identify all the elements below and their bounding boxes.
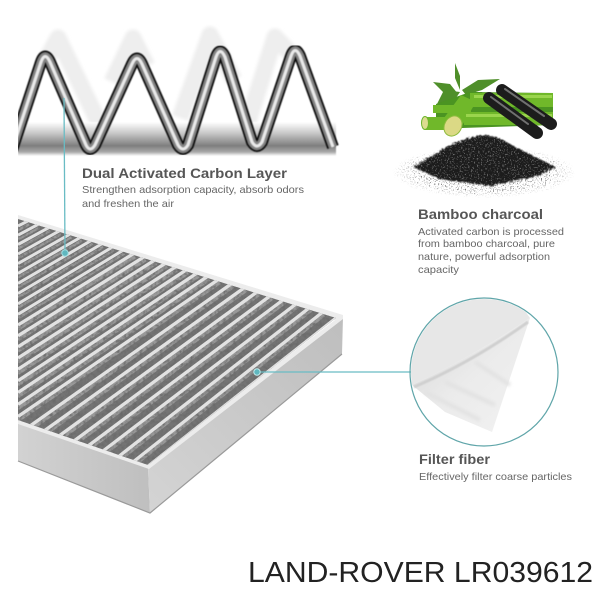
icon: bamboo and charcoal sticks [422,63,553,139]
charcoal mound [413,135,556,186]
title: part number: LAND-ROVER LR039612 [248,557,593,589]
floor shadow band [18,122,336,156]
text: bamboo charcoal description [418,226,564,276]
text: bamboo charcoal description: nature, powerful adsorption [418,251,550,263]
bamboo leaves [433,63,500,110]
callout line: filter fiber [254,369,411,375]
heading: Filter fiber: Filter fiber [419,451,491,467]
filter bottom shadow edge [18,354,342,513]
text: bamboo charcoal description: Activated carbon is processed [418,226,564,238]
text: carbon layer description: and freshen the air [82,198,175,210]
icon: filter fiber magnified circle [405,290,558,446]
pleated ribbon [12,50,333,150]
bamboo cut end [440,113,466,139]
scattered powder [392,146,576,198]
magnifier outline [410,298,558,446]
text: bamboo charcoal description: from bamboo charcoal, pure [418,238,555,250]
mound grain [416,135,554,186]
text: carbon layer description [82,184,304,210]
charcoal sticks [489,89,551,133]
fiber sheet [411,299,530,432]
panel: cabin filter photo [18,215,343,513]
text: filter fiber description: Effectively filter coarse particles [419,471,572,483]
pleated carbon surface [18,215,338,471]
small bamboo cut end [422,116,428,130]
heading: Bamboo charcoal: Bamboo charcoal [418,206,543,222]
callout line: carbon layer [62,98,68,256]
heading: Dual Activated Carbon Layer: Dual Activated Carbon Layer [82,165,288,181]
icon: charcoal powder pile [392,133,576,198]
bamboo stalks [425,93,553,130]
filter top rim [18,215,343,469]
ghost rear layer of the pleats [45,35,297,125]
bamboo stalk shadow [436,92,553,128]
filter right face [148,317,343,513]
filter front face [18,422,150,513]
panel: pleated carbon layer illustration [12,35,336,156]
text: bamboo charcoal description: capacity [418,264,460,276]
text: carbon layer description: Strengthen adsorption capacity, absorb odors [82,184,304,196]
stalk highlights [466,95,552,117]
